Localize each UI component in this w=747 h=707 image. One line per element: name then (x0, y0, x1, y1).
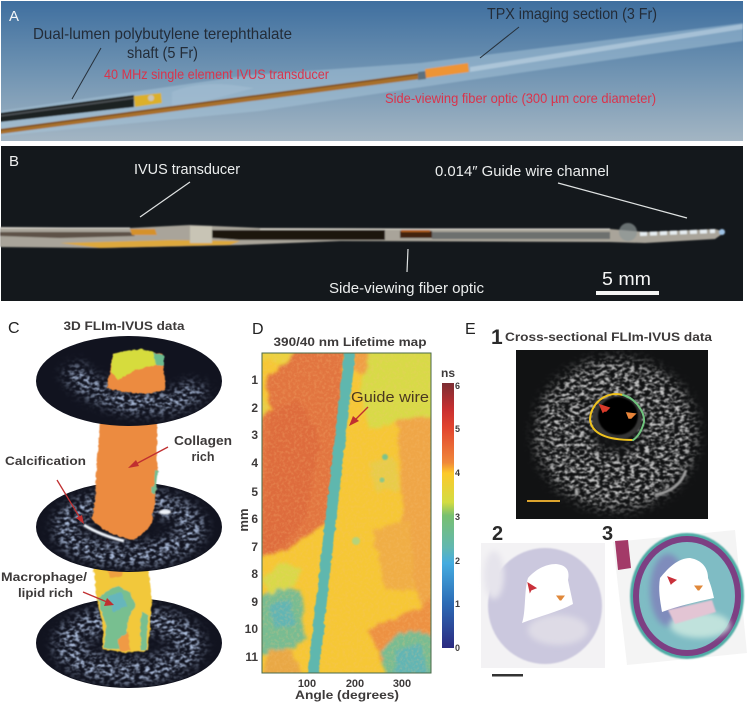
colour bar (441, 366, 460, 653)
guide wire channel label: 0.014″ Guide wire channel (435, 163, 609, 180)
guide wire annotation: Guide wire (351, 389, 429, 406)
number 2: 2 (492, 523, 503, 545)
panel B: catheter photograph (0, 146, 743, 301)
colour bar: 2 (455, 556, 460, 566)
disc 2 (36, 482, 222, 572)
label B: B (9, 153, 19, 170)
histology section 2 (481, 543, 605, 668)
annotation: calcification (5, 456, 86, 524)
panel C: 3D FLIm-IVUS data (1, 320, 232, 688)
y axis: 3 (251, 428, 258, 442)
annotation: macrophage lipid rich (1, 572, 114, 606)
annotation: calcification: Calcification (5, 456, 86, 468)
number 1: 1 (491, 326, 503, 349)
y axis: 5 (251, 485, 258, 499)
y axis: 1 (251, 373, 258, 387)
catheter illustration (0, 23, 743, 136)
colour bar: 0 (455, 643, 460, 653)
y axis: 9 (251, 595, 258, 609)
middle vessel segment (92, 420, 158, 541)
guide wire stripe (307, 345, 356, 680)
y axis: 7 (251, 540, 258, 554)
x axis: 200 (346, 678, 364, 690)
histology scale bar (492, 674, 523, 676)
colour bar: 3 (455, 512, 460, 522)
photo of catheter (0, 223, 725, 248)
x axis: 100 (298, 678, 316, 690)
annotation: collagen rich: rich (192, 450, 214, 464)
y axis: 4 (251, 456, 258, 470)
imaging section label: TPX imaging section (3 Fr) (487, 6, 657, 23)
y axis: 11 (245, 650, 258, 664)
scale bar label: 5 mm (602, 269, 651, 289)
x axis: 300 (393, 678, 411, 690)
disc 1 (36, 336, 222, 426)
leader lines (72, 27, 519, 99)
guide wire annotation (349, 389, 429, 426)
heat map (262, 354, 430, 672)
shaft label: shaft (5 Fr) (127, 45, 198, 62)
panel E: cross-sectional data and histology (465, 321, 747, 676)
transducer label: IVUS transducer (134, 161, 240, 178)
x axis (295, 678, 411, 702)
shaft label (33, 26, 292, 62)
label D: D (252, 321, 264, 338)
top vessel segment (107, 350, 165, 394)
fiber optic label: Side-viewing fiber optic (329, 280, 484, 297)
transducer label: 40 MHz single element IVUS transducer (104, 66, 329, 82)
label C: C (8, 320, 20, 337)
scale bar (596, 291, 659, 295)
fiber optic label: Side-viewing fiber optic (300 µm core diameter) (385, 90, 656, 106)
label E: E (465, 321, 476, 338)
disc 3 (36, 598, 222, 688)
y axis: 8 (251, 567, 258, 581)
label A: A (9, 8, 19, 25)
image arrows (600, 405, 609, 412)
y axis: mm (236, 508, 251, 532)
y axis (236, 373, 258, 664)
map grain (262, 353, 431, 673)
y axis: 10 (245, 622, 258, 636)
annotation: macrophage lipid rich: lipid rich (18, 588, 73, 600)
panel D: lifetime map (236, 321, 460, 702)
isolated spots (352, 537, 360, 545)
calcification highlight (84, 525, 124, 541)
y axis: 2 (251, 401, 258, 415)
IVUS cross-section image (516, 350, 708, 519)
colour bar: ns (441, 366, 455, 380)
lower vessel segment (93, 565, 152, 652)
y axis: 6 (251, 512, 258, 526)
annotation: macrophage lipid rich: Macrophage/ (1, 572, 88, 584)
colour bar: 1 (455, 599, 460, 609)
shaft label: Dual-lumen polybutylene terephthalate (33, 26, 292, 43)
contour (590, 394, 644, 440)
heading: Cross-sectional FLIm-IVUS data (505, 332, 713, 344)
image scale bar (527, 500, 560, 502)
annotation: collagen rich (128, 434, 232, 468)
leader lines (140, 182, 687, 272)
heading: 390/40 nm Lifetime map (274, 337, 426, 349)
number 3: 3 (602, 523, 613, 545)
histology section 3 (613, 530, 747, 665)
panel A: catheter schematic (0, 1, 743, 141)
colour bar: 4 (455, 468, 460, 478)
annotation: collagen rich: Collagen (174, 434, 232, 448)
colour bar: 6 (455, 381, 460, 391)
heading: 3D FLIm-IVUS data (64, 321, 185, 333)
x axis: Angle (degrees) (295, 688, 399, 702)
colour bar: 5 (455, 424, 460, 434)
